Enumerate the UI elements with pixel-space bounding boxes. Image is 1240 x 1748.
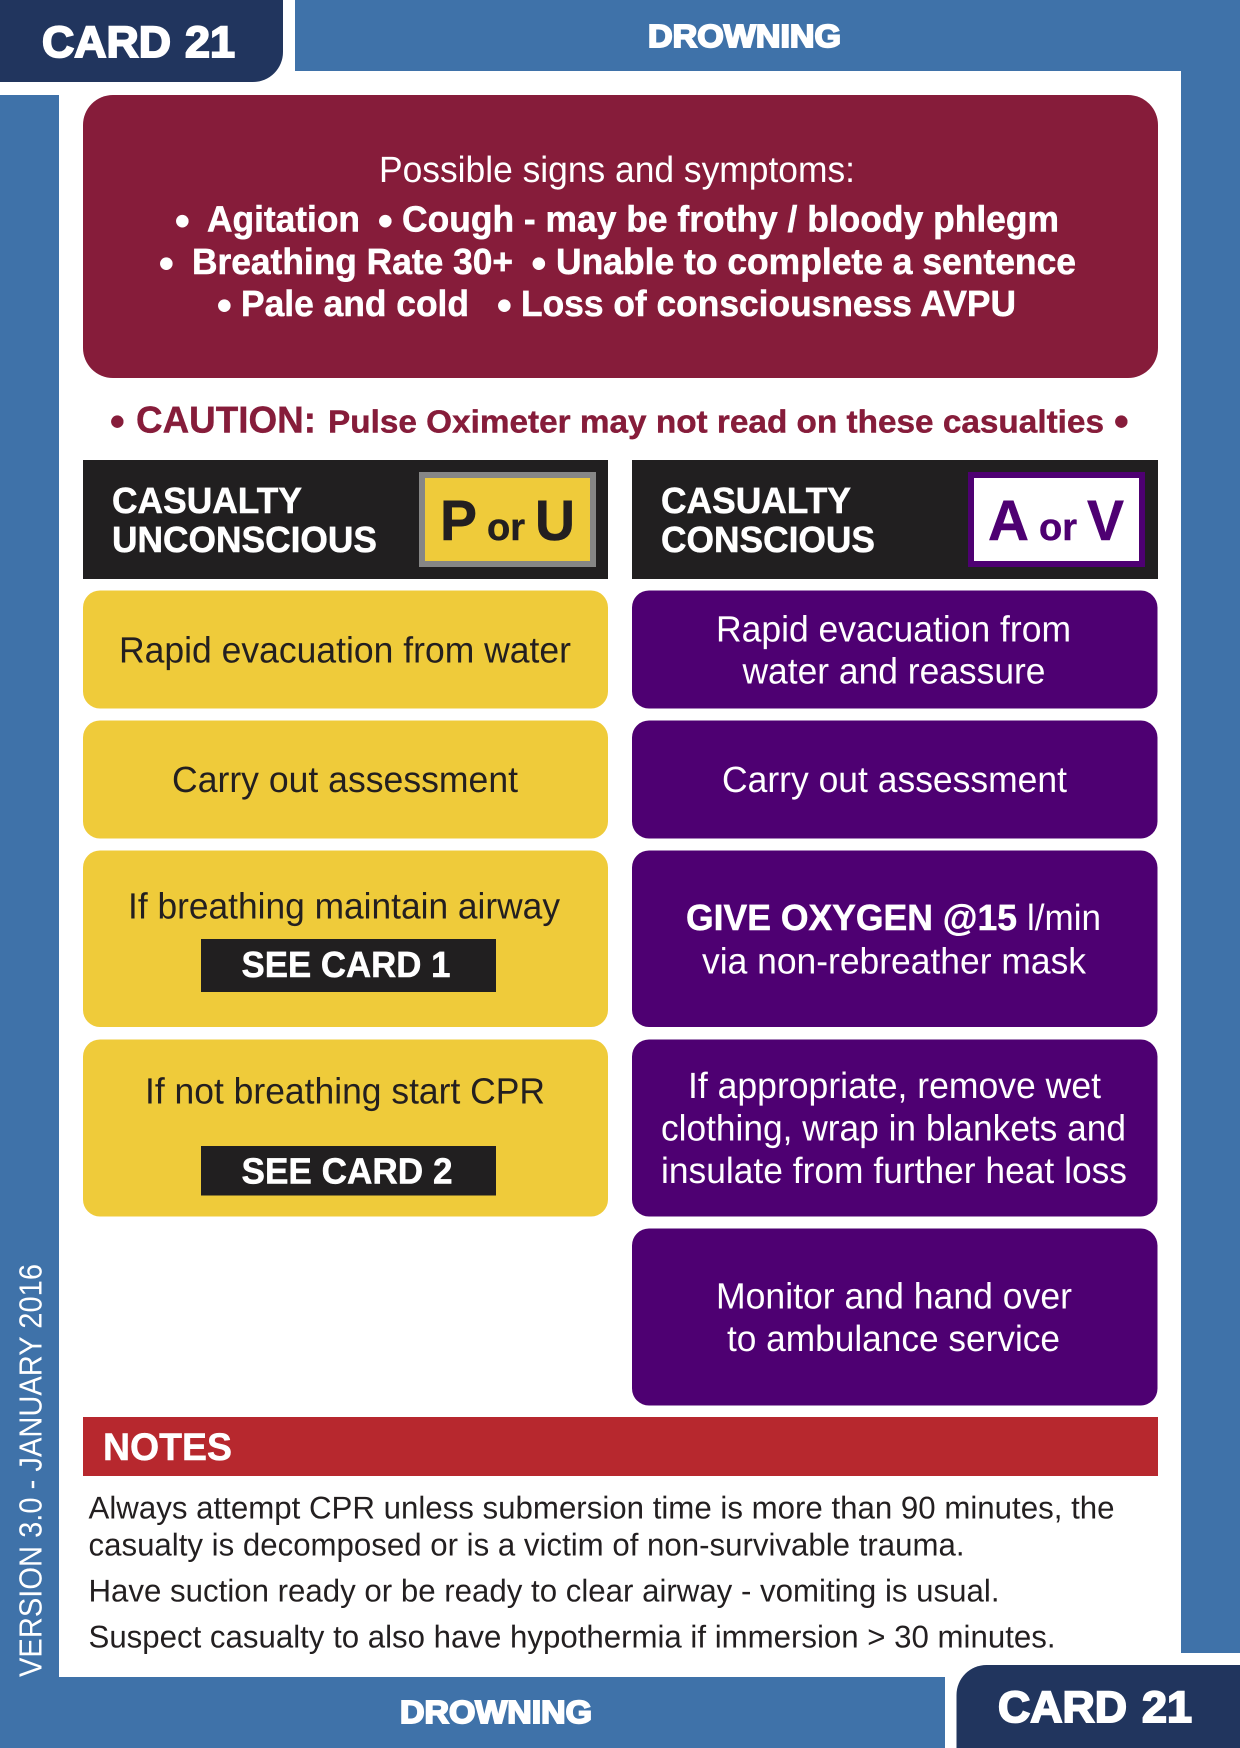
- see card 1: SEE CARD 1: [242, 944, 450, 985]
- top card tab: 21: [185, 18, 235, 67]
- caution line: Pulse Oximeter may not read on these casualties: [328, 404, 1104, 440]
- header: casualty conscious: [632, 460, 1158, 579]
- notes header: NOTES: [103, 1426, 232, 1469]
- step: give oxygen: GIVE OXYGEN @15: [686, 897, 1017, 938]
- step: rapid evacuation and reassure (conscious): [632, 590, 1158, 708]
- step: monitor and hand over: [632, 1228, 1158, 1406]
- step: give oxygen: [632, 850, 1158, 1027]
- top band: [295, 0, 1240, 71]
- notes text: Always attempt CPR unless submersion time is more than 90 minutes, the: [88, 1490, 1114, 1526]
- header: casualty conscious: CONSCIOUS: [661, 519, 875, 560]
- top title: DROWNING: [648, 18, 841, 54]
- step: if breathing: If breathing maintain airway: [128, 886, 561, 926]
- step: remove wet clothing: [632, 1040, 1158, 1216]
- see card 2: SEE CARD 2: [242, 1150, 452, 1192]
- caution line: •: [110, 398, 125, 444]
- caution line: [110, 398, 1129, 444]
- step: monitor and hand over: to ambulance service: [727, 1318, 1060, 1359]
- step: if not breathing: [83, 1040, 608, 1216]
- step: rapid evacuation (unconscious): Rapid evacuation from water: [119, 630, 571, 670]
- step: remove wet clothing: If appropriate, remove wet: [688, 1065, 1101, 1106]
- step: if not breathing: If not breathing start CPR: [145, 1071, 545, 1112]
- see card 2: [201, 1146, 496, 1196]
- step: assessment (unconscious): [83, 720, 608, 838]
- badge: P or U: [422, 475, 593, 564]
- signs list: •: [532, 240, 546, 286]
- step: assessment (unconscious): Carry out assessment: [172, 759, 518, 800]
- header: casualty unconscious: UNCONSCIOUS: [112, 519, 377, 560]
- signs list: •: [175, 197, 190, 244]
- badge: A or V: V: [1087, 489, 1124, 553]
- step: rapid evacuation (unconscious): [83, 590, 608, 708]
- signs list: Pale and cold: [241, 283, 469, 324]
- step: rapid evacuation and reassure (conscious): water and reassure: [742, 650, 1046, 692]
- signs list: [159, 197, 1076, 328]
- badge: A or V: A: [988, 489, 1029, 553]
- bottom band: [0, 1677, 945, 1748]
- step: give oxygen: via non-rebreather mask: [702, 940, 1087, 982]
- header: casualty unconscious: [83, 460, 608, 579]
- step: if breathing: [83, 850, 608, 1027]
- notes text: Have suction ready or be ready to clear airway - vomiting is usual.: [88, 1573, 1000, 1609]
- badge: P or U: U: [535, 489, 575, 553]
- top card tab: [0, 0, 283, 82]
- header: casualty unconscious: CASUALTY: [112, 480, 302, 521]
- version label: VERSION 3.0 - JANUARY 2016: [12, 1264, 48, 1677]
- notes text: Suspect casualty to also have hypothermia if immersion > 30 minutes.: [88, 1618, 1056, 1654]
- bottom card tab: 21: [1142, 1683, 1192, 1732]
- header: casualty conscious: CASUALTY: [661, 480, 851, 521]
- signs list: Breathing Rate 30+: [192, 241, 513, 282]
- step: rapid evacuation and reassure (conscious): Rapid evacuation from: [716, 608, 1071, 650]
- signs list: Unable to complete a sentence: [556, 241, 1076, 282]
- notes text: casualty is decomposed or is a victim of non-survivable trauma.: [88, 1526, 964, 1562]
- step: remove wet clothing: clothing, wrap in blankets and: [661, 1108, 1126, 1149]
- signs list: Agitation: [207, 198, 360, 240]
- step: monitor and hand over: Monitor and hand over: [716, 1276, 1072, 1317]
- bottom title: DROWNING: [400, 1694, 592, 1730]
- bottom card tab: [956, 1665, 1240, 1748]
- bottom card tab: CARD: [998, 1683, 1127, 1732]
- signs heading: Possible signs and symptoms:: [379, 149, 855, 190]
- signs list: Cough - may be frothy / bloody phlegm: [402, 198, 1059, 240]
- badge: P or U: or: [487, 507, 525, 549]
- step: give oxygen: l/min: [1027, 897, 1101, 938]
- left side band: [0, 95, 59, 1748]
- notes header: [83, 1417, 1158, 1476]
- right side band: [1181, 0, 1240, 1653]
- badge: A or V: [971, 475, 1142, 564]
- signs list: •: [217, 282, 232, 328]
- signs list: •: [159, 240, 174, 286]
- signs list: •: [378, 197, 393, 244]
- top card tab: CARD: [42, 18, 171, 67]
- caution line: •: [1114, 398, 1129, 444]
- see card 1: [201, 939, 496, 992]
- badge: A or V: or: [1039, 507, 1077, 549]
- step: assessment (conscious): Carry out assessment: [722, 759, 1067, 800]
- caution line: CAUTION:: [136, 398, 316, 440]
- notes text: [88, 1490, 1114, 1654]
- signs list: •: [497, 282, 512, 328]
- panel: signs and symptoms: [83, 95, 1158, 378]
- badge: P or U: P: [440, 489, 477, 553]
- step: assessment (conscious): [632, 720, 1158, 838]
- step: remove wet clothing: insulate from further heat loss: [661, 1150, 1127, 1191]
- signs list: Loss of consciousness AVPU: [521, 283, 1016, 324]
